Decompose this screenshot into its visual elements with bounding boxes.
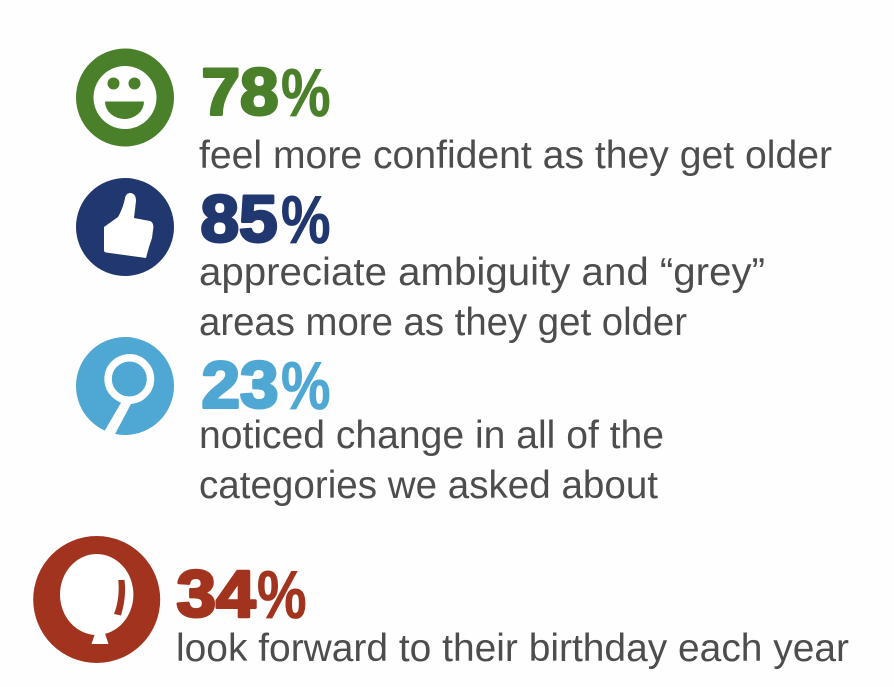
icon: balloon: [33, 536, 160, 663]
stat: 85%: 85: [200, 182, 278, 256]
stat: 85%: [200, 182, 330, 258]
stat: 23%: %: [281, 348, 330, 424]
stat: 23%: [202, 348, 330, 424]
stat: 78%: [202, 54, 330, 131]
text: feel more confident: feel more confident as they get older: [199, 134, 832, 177]
stat: 34%: 34: [176, 556, 256, 630]
text: appreciate ambiguity: [199, 251, 765, 344]
text: noticed change: [199, 414, 664, 507]
icon: magnifying glass: [76, 337, 174, 436]
text: look forward: look forward to their birthday each year: [176, 627, 849, 670]
stat: 34%: [176, 556, 306, 633]
stat: 85%: %: [281, 182, 330, 258]
text: appreciate ambiguity: areas more as they get older: [199, 301, 687, 344]
icon: smiley face: [76, 48, 174, 146]
stat: 23%: 23: [202, 348, 278, 422]
text: noticed change: noticed change in all of the: [199, 414, 664, 457]
text: noticed change: categories we asked about: [199, 464, 658, 507]
icon: thumbs up: [76, 178, 174, 276]
text: appreciate ambiguity: appreciate ambiguity and “grey”: [199, 251, 765, 294]
stat: 78%: 78: [202, 54, 278, 128]
stat: 78%: %: [281, 55, 330, 131]
stat: 34%: %: [257, 557, 306, 633]
